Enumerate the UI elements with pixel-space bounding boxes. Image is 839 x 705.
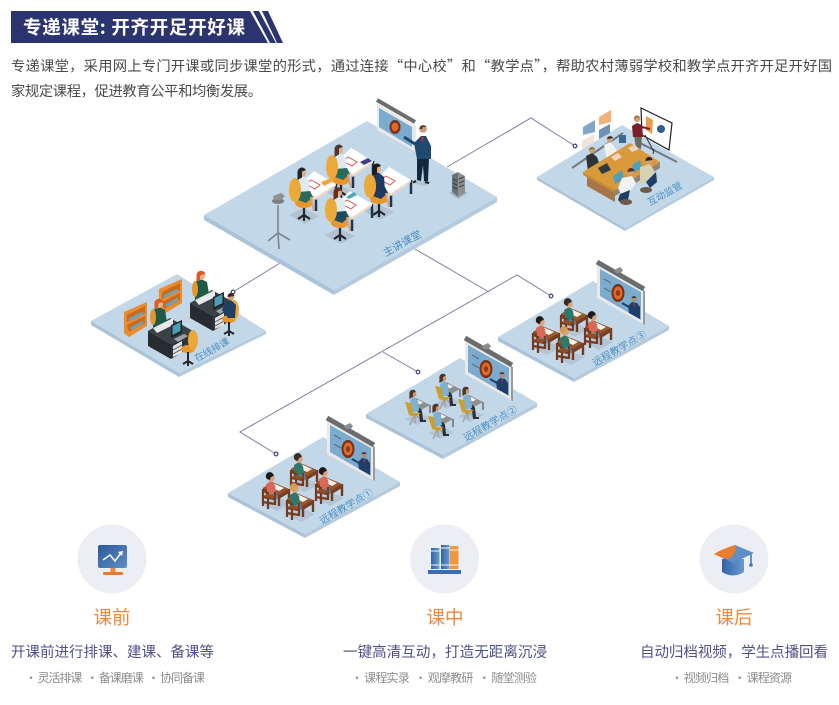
panel: before class <box>11 524 214 686</box>
description: 一键高清互动，打造无距离沉浸 <box>343 641 547 662</box>
classroom board <box>377 100 416 152</box>
panel: main classroom <box>204 100 497 295</box>
icon: books <box>410 524 479 594</box>
panel: online lesson preparation <box>91 271 266 377</box>
panel: remote teaching point 2 <box>366 338 537 459</box>
bookshelves <box>124 279 182 337</box>
panel: after class <box>640 524 828 686</box>
students in main classroom <box>289 145 411 244</box>
water cooler <box>619 135 626 143</box>
intro text <box>11 55 832 101</box>
label: online lesson preparation: 在线排课 <box>191 334 232 364</box>
screen <box>327 418 375 481</box>
feature list: · 视频归档 · 课程资源 <box>671 669 792 686</box>
heading: 课前 <box>93 604 131 630</box>
projection screen <box>641 108 672 154</box>
conference table <box>583 143 660 202</box>
description: 自动归档视频，学生点播回看 <box>640 641 828 662</box>
people at front of table <box>618 157 657 205</box>
server rack <box>449 172 468 199</box>
label: interactive supervision: 互动监管 <box>644 178 685 208</box>
floating charts <box>582 110 611 149</box>
label: remote point 1: 远程教学点① <box>316 484 375 527</box>
students <box>405 374 484 439</box>
presenter <box>632 115 650 149</box>
reviewer seated <box>222 293 239 336</box>
title banner <box>11 11 283 43</box>
intro text: 家规定课程，促进教育公平和均衡发展。 <box>11 80 262 101</box>
chair front <box>181 330 198 366</box>
panel: remote teaching point 3 <box>498 262 669 382</box>
label: remote point 2: 远程教学点② <box>460 401 519 444</box>
feature list: · 课程实录 · 观摩教研 · 随堂测验 <box>351 669 537 686</box>
people at back of table <box>586 136 620 172</box>
label: remote point 3: 远程教学点③ <box>589 326 648 369</box>
panel: interactive supervision <box>537 108 714 231</box>
title banner: 专递课堂: 开齐开足开好课 <box>23 14 245 40</box>
screen <box>465 338 513 401</box>
panel: remote teaching point 1 <box>228 418 400 538</box>
students <box>533 298 613 365</box>
feature list: · 灵活排课 · 备课磨课 · 协同备课 <box>25 669 205 686</box>
label: main classroom: 主讲课堂 <box>380 227 424 260</box>
panel: during class <box>343 524 547 686</box>
icon: graduation cap <box>700 524 768 594</box>
students <box>263 453 344 522</box>
icon: monitor with rising chart <box>78 524 146 594</box>
intro text: 专递课堂，采用网上专门开课或同步课堂的形式，通过连接“中心校”和“教学点”，帮助农村薄弱学校和教学点开齐开足开好国 <box>11 55 832 76</box>
camera on tripod <box>268 193 290 249</box>
teacher <box>404 125 432 186</box>
floor rails <box>572 133 677 168</box>
desk with staff <box>148 271 235 359</box>
heading: 课后 <box>715 604 753 630</box>
description: 开课前进行排课、建课、备课等 <box>11 641 214 662</box>
screen <box>597 262 645 325</box>
connector lines <box>231 118 577 456</box>
heading: 课中 <box>426 604 464 630</box>
